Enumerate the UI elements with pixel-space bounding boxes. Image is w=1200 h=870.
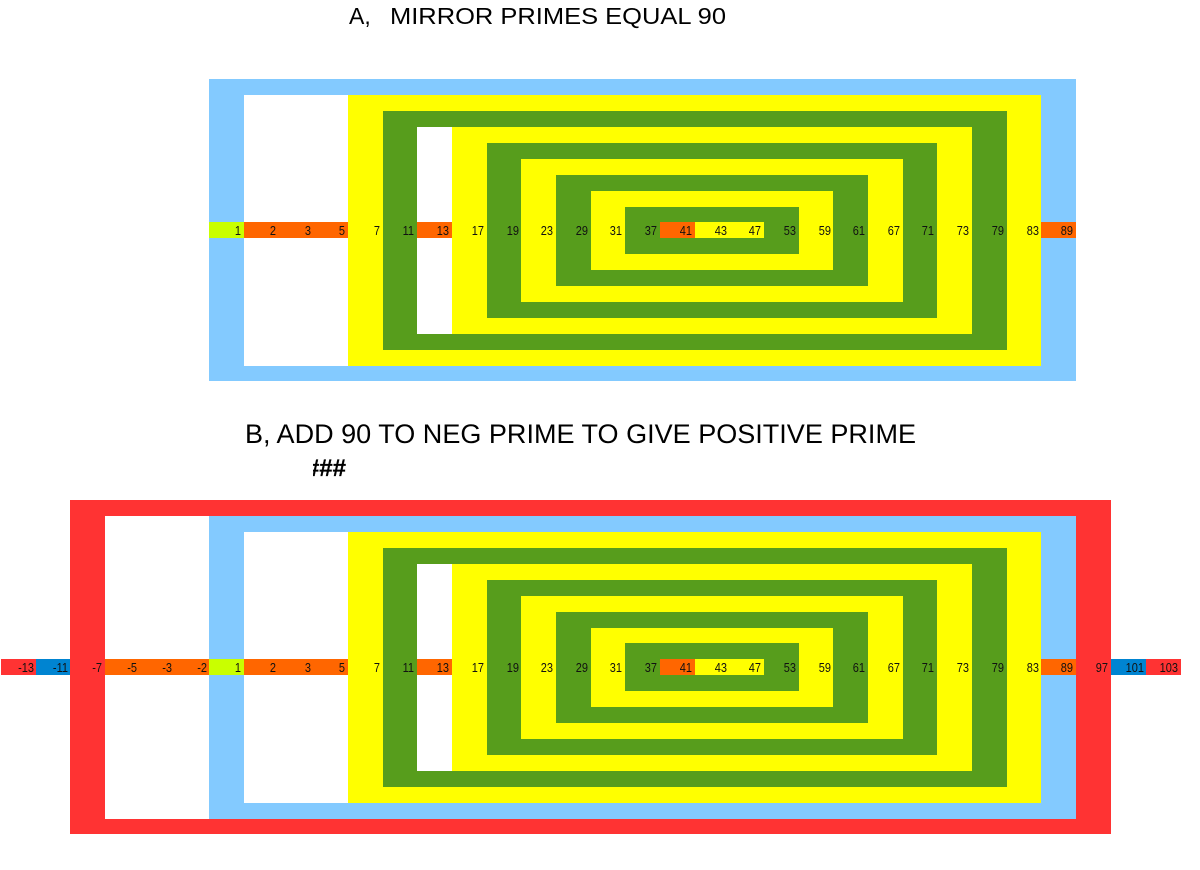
number labels A: 73 <box>957 223 969 238</box>
number labels B: 17 <box>472 660 484 675</box>
yellow rectangle 23 and 67 <box>521 159 903 302</box>
white gap 13 <box>417 127 452 334</box>
number labels A: 2 <box>270 223 276 238</box>
number labels B: 53 <box>784 660 796 675</box>
number labels B: 61 <box>853 660 865 675</box>
number labels B: 11 <box>403 660 414 675</box>
number labels B: 37 <box>645 660 657 675</box>
number labels A: 71 <box>922 223 934 238</box>
number labels A: 17 <box>472 223 484 238</box>
number labels A: 5 <box>339 223 345 238</box>
number labels A: 43 <box>715 223 727 238</box>
white gap 2 to 5 <box>244 532 348 803</box>
green rectangle 29 and 61 <box>556 612 868 723</box>
number labels B: 101 <box>1126 660 1144 675</box>
number labels B: 67 <box>888 660 900 675</box>
number labels A: 61 <box>853 223 865 238</box>
number labels B: -5 <box>127 660 137 675</box>
number labels B: -2 <box>197 660 207 675</box>
yellow rectangle 17 and 73 <box>452 564 972 771</box>
number labels B: 1 <box>235 660 241 675</box>
white gap -5 to -2 <box>105 516 209 819</box>
number labels A: 29 <box>576 223 588 238</box>
white gap 2 to 5 <box>244 95 348 366</box>
number labels B: 13 <box>437 660 449 675</box>
number labels B: 97 <box>1096 660 1108 675</box>
yellow rectangle 31 and 59 <box>591 628 833 707</box>
number labels A: 79 <box>992 223 1004 238</box>
number labels B: 43 <box>715 660 727 675</box>
yellow rectangle 7 and 83 <box>348 95 1041 366</box>
number labels B: -7 <box>92 660 102 675</box>
panel: A mirror primes nested rectangles <box>209 79 1076 381</box>
green rectangle 37 and 53 <box>625 643 799 691</box>
number labels A: 37 <box>645 223 657 238</box>
outer blue frame <box>209 79 1076 381</box>
number labels A: 31 <box>610 223 622 238</box>
number labels A: 47 <box>749 223 761 238</box>
number labels B: -13 <box>18 660 34 675</box>
centre row cells <box>209 222 1076 238</box>
centre row cells <box>1 659 1181 675</box>
number labels A: 59 <box>819 223 831 238</box>
yellow rectangle 17 and 73 <box>452 127 972 334</box>
number labels B: 3 <box>305 660 311 675</box>
number labels A: 89 <box>1061 223 1073 238</box>
number labels B: 71 <box>922 660 934 675</box>
number labels A <box>235 223 1073 238</box>
number labels B: 7 <box>374 660 380 675</box>
green rectangle 11 and 79 <box>383 111 1007 350</box>
blue frame <box>209 516 1076 819</box>
yellow rectangle 31 and 59 <box>591 191 833 270</box>
number labels B: 41 <box>680 660 692 675</box>
number labels A: 11 <box>403 223 414 238</box>
number labels B: -3 <box>162 660 172 675</box>
number labels A: 53 <box>784 223 796 238</box>
green rectangle 19 and 71 <box>487 143 937 318</box>
number labels B: 23 <box>541 660 553 675</box>
number labels B: 19 <box>507 660 519 675</box>
number labels B: 5 <box>339 660 345 675</box>
number labels B: 103 <box>1160 660 1178 675</box>
title: panel A: MIRROR PRIMES EQUAL 90 <box>390 3 726 29</box>
number labels B: 89 <box>1061 660 1073 675</box>
number labels A: 67 <box>888 223 900 238</box>
number labels A: 23 <box>541 223 553 238</box>
number labels B: 79 <box>992 660 1004 675</box>
yellow rectangle 23 and 67 <box>521 596 903 739</box>
green rectangle 11 and 79 <box>383 548 1007 787</box>
number labels B: 73 <box>957 660 969 675</box>
number labels A: 83 <box>1027 223 1039 238</box>
panel: B extended primes nested rectangles <box>1 500 1181 834</box>
title: panel B: B, ADD 90 TO NEG PRIME TO GIVE POSITIVE PRIME <box>245 419 916 449</box>
number labels B: 31 <box>610 660 622 675</box>
number labels B <box>18 660 1178 675</box>
white gap 13 <box>417 564 452 771</box>
number labels A: 7 <box>374 223 380 238</box>
number labels A: 1 <box>235 223 241 238</box>
green rectangle 37 and 53 <box>625 207 799 254</box>
title: panel A: A, <box>349 3 371 29</box>
number labels B: -11 <box>53 660 68 675</box>
number labels A: 13 <box>437 223 449 238</box>
overflow marker hashes: ### <box>306 455 346 482</box>
green rectangle 19 and 71 <box>487 580 937 755</box>
number labels B: 59 <box>819 660 831 675</box>
number labels A: 41 <box>680 223 692 238</box>
outer red frame <box>70 500 1111 834</box>
number labels B: 47 <box>749 660 761 675</box>
number labels B: 2 <box>270 660 276 675</box>
number labels B: 83 <box>1027 660 1039 675</box>
yellow rectangle 7 and 83 <box>348 532 1041 803</box>
number labels A: 3 <box>305 223 311 238</box>
number labels A: 19 <box>507 223 519 238</box>
green rectangle 29 and 61 <box>556 175 868 286</box>
number labels B: 29 <box>576 660 588 675</box>
